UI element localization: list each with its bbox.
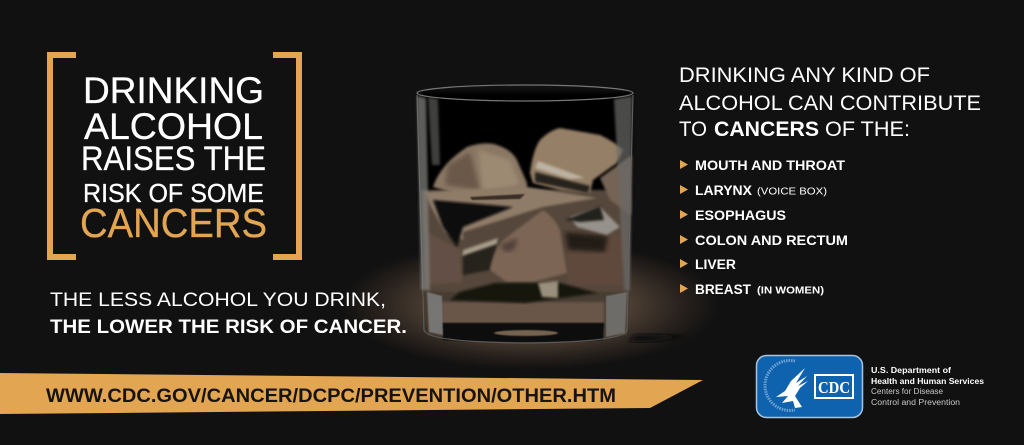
- item: liver: LIVER: [695, 257, 736, 272]
- right bracket: [273, 55, 299, 257]
- ice cubes: [433, 143, 527, 198]
- intro text: OF THE:: [825, 118, 910, 141]
- icon: CDC box: CDC: [818, 378, 850, 397]
- glass rim and walls: [417, 85, 633, 343]
- intro text: TO: [679, 118, 707, 141]
- icon: HHS seal: [765, 360, 808, 410]
- headline text: ALCOHOL: [84, 106, 263, 147]
- headline text: DRINKING: [83, 70, 264, 111]
- tagline: [50, 289, 407, 338]
- intro text: CANCERS: [714, 118, 819, 141]
- item: larynx: [680, 183, 827, 198]
- department text: Centers for Disease: [871, 387, 944, 396]
- url banner: WWW.CDC.GOV/CANCER/DCPC/PREVENTION/OTHER.HTM: [46, 386, 616, 407]
- item: breast: BREAST: [695, 282, 752, 297]
- photo: whiskey glass with ice on table: [340, 85, 720, 370]
- CDC HHS logo: [756, 356, 862, 418]
- department text: [871, 366, 985, 407]
- intro text: DRINKING ANY KIND OF: [679, 64, 930, 87]
- department text: U.S. Department of: [871, 366, 951, 375]
- cancers highlight: CANCERS: [80, 200, 267, 246]
- item: mouth and throat: MOUTH AND THROAT: [695, 158, 846, 173]
- left bracket: [50, 55, 76, 257]
- glass liquid: [421, 190, 631, 292]
- item: larynx: (VOICE BOX): [757, 186, 827, 198]
- department text: Health and Human Services: [871, 377, 985, 386]
- band and reflections: [425, 187, 597, 240]
- tagline: THE LOWER THE RISK OF CANCER.: [50, 316, 407, 338]
- item: breast: (IN WOMEN): [757, 286, 824, 296]
- headline text: RAISES THE: [81, 140, 266, 178]
- intro text: ALCOHOL CAN CONTRIBUTE: [679, 92, 981, 115]
- cancer list: [680, 158, 848, 297]
- tagline: THE LESS ALCOHOL YOU DRINK,: [50, 289, 386, 311]
- headline with brackets: [50, 55, 299, 257]
- department text: Control and Prevention: [871, 398, 960, 407]
- item: breast: [680, 282, 824, 297]
- item: esophagus: ESOPHAGUS: [695, 208, 786, 223]
- glass base: [424, 292, 630, 342]
- intro text: [679, 64, 981, 141]
- item: colon and rectum: COLON AND RECTUM: [695, 233, 848, 248]
- url banner: [0, 373, 703, 414]
- headline text: [81, 70, 266, 208]
- headline text: RISK OF SOME: [83, 178, 264, 208]
- item: larynx: LARYNX: [695, 183, 752, 198]
